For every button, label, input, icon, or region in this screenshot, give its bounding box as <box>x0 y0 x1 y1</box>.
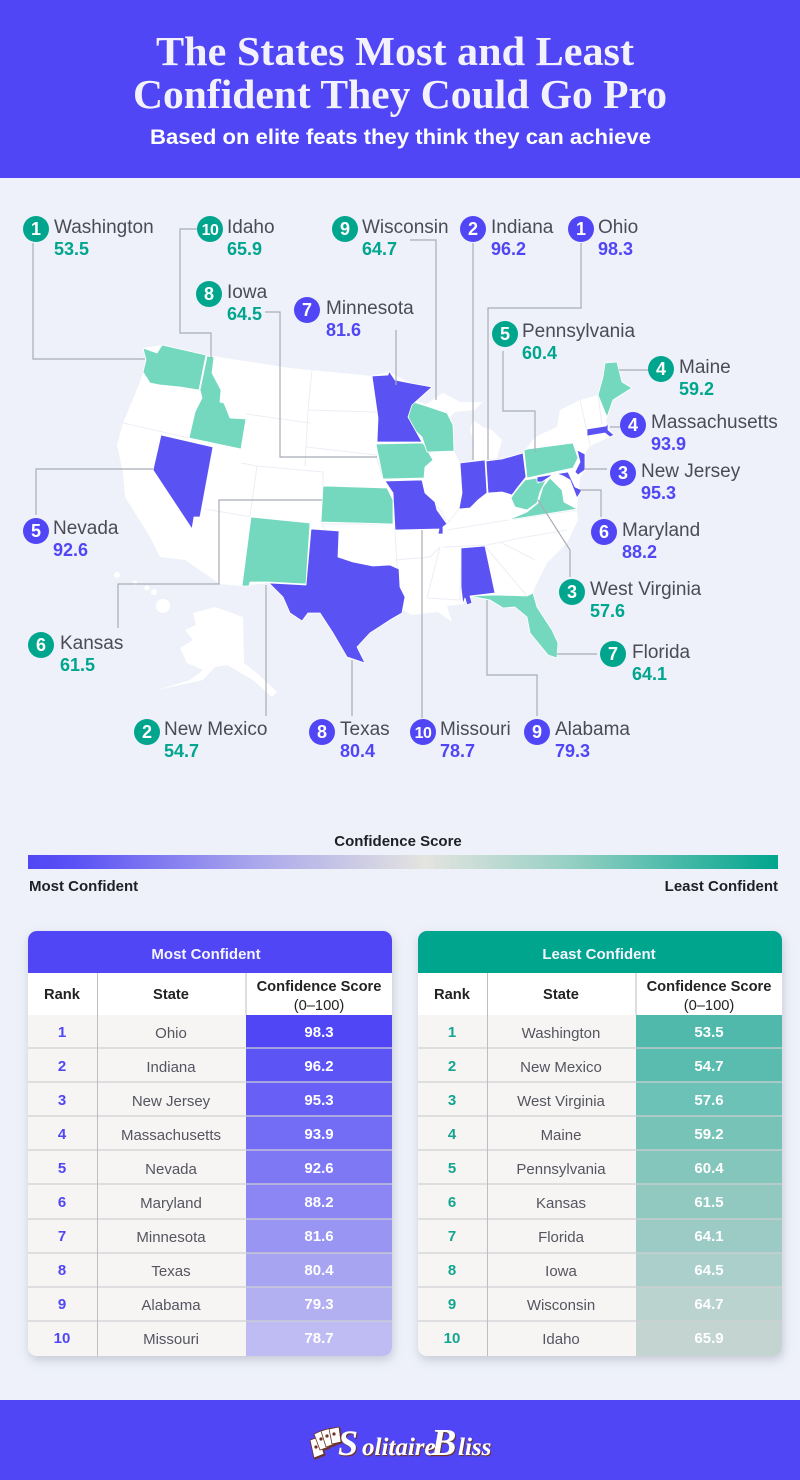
label: Ohio: 98.3 <box>598 239 633 259</box>
label: Missouri <box>410 719 511 761</box>
rows: Iowa <box>545 1263 577 1280</box>
label: Massachusetts: 4 <box>628 415 638 435</box>
leader lines <box>33 229 648 718</box>
base map: non-ranked states <box>117 345 614 622</box>
label: West Virginia <box>559 579 702 621</box>
label: Indiana: Indiana <box>491 217 554 238</box>
rows: 65.9 <box>694 1330 724 1347</box>
rows: 88.2 <box>304 1194 334 1211</box>
rows: 10 <box>54 1330 70 1347</box>
rows: 93.9 <box>304 1126 334 1143</box>
rows: 4 <box>448 1126 457 1143</box>
label: Maine: Maine <box>679 357 731 378</box>
label: New Jersey: 3 <box>618 463 628 483</box>
rows: 4 <box>58 1126 67 1143</box>
label: Massachusetts: 93.9 <box>651 434 686 454</box>
column headers <box>434 979 771 1014</box>
rows: Wisconsin <box>527 1297 595 1314</box>
rows: Kansas <box>536 1195 586 1212</box>
rows: 59.2 <box>694 1126 724 1143</box>
label: Washington: 53.5 <box>54 239 89 259</box>
label: Maryland <box>591 519 700 562</box>
column headers: Confidence Score <box>647 979 771 995</box>
label: Florida: 64.1 <box>632 664 667 684</box>
label: Maine <box>648 356 731 399</box>
label: Iowa: 64.5 <box>227 304 262 324</box>
rows: 64.1 <box>694 1228 724 1245</box>
rows: 6 <box>58 1194 66 1211</box>
label: Idaho: 10 <box>202 222 219 239</box>
label: Kansas: Kansas <box>60 633 123 654</box>
label: Minnesota: 81.6 <box>326 320 361 340</box>
label: Florida <box>600 641 691 684</box>
label: Nevada <box>23 518 119 560</box>
label: West Virginia: 57.6 <box>590 601 625 621</box>
rows: Indiana <box>146 1059 196 1076</box>
rows <box>444 1024 724 1348</box>
rows: 3 <box>58 1092 66 1109</box>
header banner <box>0 0 800 178</box>
label: New Mexico: 2 <box>142 722 152 742</box>
title: Confident They Could Go Pro <box>133 71 667 117</box>
label: Alabama: 9 <box>532 722 542 742</box>
label: New Jersey: 95.3 <box>641 483 676 503</box>
rows: 57.6 <box>694 1092 724 1109</box>
label: West Virginia: 3 <box>567 582 577 602</box>
rows: 60.4 <box>694 1160 724 1177</box>
column headers: (0–100) <box>294 998 344 1014</box>
rows: 95.3 <box>304 1092 334 1109</box>
label: Nevada: Nevada <box>53 518 119 539</box>
wordmark: liss <box>458 1434 491 1461</box>
rows: 8 <box>58 1262 66 1279</box>
label: New Jersey: New Jersey <box>641 461 741 482</box>
label: Missouri: Missouri <box>440 719 511 740</box>
title: The States Most and Least <box>156 28 634 74</box>
label: Alabama: Alabama <box>555 719 630 740</box>
wordmark: S <box>338 1423 358 1463</box>
label: New Mexico <box>134 719 267 761</box>
map of the United States <box>114 345 632 697</box>
label: Indiana: 2 <box>468 219 478 239</box>
label: Texas: Texas <box>340 719 390 740</box>
table title: Most Confident <box>151 946 261 963</box>
rows: Alabama <box>141 1297 201 1314</box>
subtitle: Based on elite feats they think they can achieve <box>150 126 651 149</box>
label: Washington <box>23 216 154 259</box>
rows: 8 <box>448 1262 456 1279</box>
label: Texas <box>309 719 390 761</box>
label: New Mexico: 54.7 <box>164 741 199 761</box>
rows: 9 <box>58 1296 66 1313</box>
rows: 78.7 <box>304 1330 334 1347</box>
rows: 80.4 <box>304 1262 334 1279</box>
label: Texas: 8 <box>317 722 327 742</box>
label: Maryland: 6 <box>599 522 609 542</box>
label: Indiana <box>460 216 554 259</box>
label: Idaho: Idaho <box>227 217 275 238</box>
column headers: Rank <box>44 987 81 1003</box>
rows: 79.3 <box>304 1296 334 1313</box>
rows <box>54 1024 334 1348</box>
Hawaii <box>114 572 170 613</box>
legend: confidence score gradient <box>28 833 778 895</box>
Least confident states <box>143 345 632 658</box>
label: Ohio: 1 <box>576 219 586 239</box>
rows: 7 <box>58 1228 66 1245</box>
rows: 5 <box>58 1160 66 1177</box>
rows: 10 <box>444 1330 460 1347</box>
rows: 7 <box>448 1228 456 1245</box>
rows: 6 <box>448 1194 456 1211</box>
rows: New Jersey <box>132 1093 211 1110</box>
footer banner <box>0 1400 800 1480</box>
label: Wisconsin: Wisconsin <box>362 217 449 238</box>
label: Maine: 4 <box>656 359 666 379</box>
label: Iowa: Iowa <box>227 282 268 303</box>
icon: card pips <box>314 1432 336 1449</box>
label: Maine: 59.2 <box>679 379 714 399</box>
table title: Least Confident <box>542 946 656 963</box>
label: Idaho <box>197 216 275 259</box>
column headers: Confidence Score <box>257 979 381 995</box>
rows: Minnesota <box>136 1229 206 1246</box>
rows: 64.5 <box>694 1262 724 1279</box>
label: New Mexico: New Mexico <box>164 719 267 740</box>
label: Missouri: 10 <box>415 725 432 742</box>
label: Idaho: 65.9 <box>227 239 262 259</box>
column headers <box>44 979 381 1014</box>
rows: 96.2 <box>304 1058 334 1075</box>
column headers: Rank <box>434 987 471 1003</box>
rows: Florida <box>538 1229 585 1246</box>
logo: Solitaire Bliss <box>310 1422 491 1464</box>
rows: 1 <box>58 1024 66 1041</box>
Alaska <box>157 607 277 697</box>
label: Iowa: 8 <box>204 284 214 304</box>
column headers: (0–100) <box>684 998 734 1014</box>
label: Ohio: Ohio <box>598 217 638 238</box>
rows: Maine <box>541 1127 581 1144</box>
label: Kansas: 61.5 <box>60 655 95 675</box>
legend: confidence score gradient: Least Confident <box>665 878 778 895</box>
label: Minnesota <box>294 297 414 340</box>
label: Indiana: 96.2 <box>491 239 526 259</box>
rows: Maryland <box>140 1195 202 1212</box>
rows: Washington <box>522 1025 600 1042</box>
label: Pennsylvania: 60.4 <box>522 343 557 363</box>
rows: 3 <box>448 1092 456 1109</box>
label: Pennsylvania: 5 <box>500 324 510 344</box>
label: Missouri: 78.7 <box>440 741 475 761</box>
label: Pennsylvania: Pennsylvania <box>522 321 635 342</box>
rows: 1 <box>448 1024 456 1041</box>
rows: Ohio <box>155 1025 187 1042</box>
label: Alabama <box>524 719 630 761</box>
rows: 9 <box>448 1296 456 1313</box>
wordmark: B <box>430 1422 456 1464</box>
icon: fanned playing cards <box>310 1427 341 1458</box>
label: Kansas: 6 <box>36 635 46 655</box>
rows: 53.5 <box>694 1024 724 1041</box>
label: Nevada: 5 <box>31 521 41 541</box>
rows: New Mexico <box>520 1059 602 1076</box>
rows: 98.3 <box>304 1024 334 1041</box>
label: Florida: 7 <box>608 644 618 664</box>
label: Florida: Florida <box>632 642 691 663</box>
column headers: State <box>543 987 579 1003</box>
rows: 64.7 <box>694 1296 724 1313</box>
label: Massachusetts: Massachusetts <box>651 412 778 433</box>
title <box>133 28 667 117</box>
panel: least confident table <box>418 931 782 1356</box>
panel: most confident table <box>28 931 392 1356</box>
rows: 2 <box>58 1058 66 1075</box>
rows: 2 <box>448 1058 456 1075</box>
column headers: State <box>153 987 189 1003</box>
label: Kansas <box>28 632 123 675</box>
wordmark: olitaire <box>362 1434 436 1461</box>
label: Texas: 80.4 <box>340 741 375 761</box>
label: Pennsylvania <box>492 321 635 363</box>
rows: Pennsylvania <box>516 1161 606 1178</box>
label: Maryland: 88.2 <box>622 542 657 562</box>
label: Wisconsin: 64.7 <box>362 239 397 259</box>
label: Minnesota: 7 <box>302 300 312 320</box>
legend: confidence score gradient: Confidence Score <box>334 833 462 850</box>
label: Massachusetts <box>620 412 778 454</box>
Most confident states <box>153 371 614 663</box>
rows: Texas <box>151 1263 191 1280</box>
rows: 92.6 <box>304 1160 334 1177</box>
rows: 5 <box>448 1160 456 1177</box>
label: Washington: 1 <box>31 219 41 239</box>
rows: 54.7 <box>694 1058 724 1075</box>
rows: Missouri <box>143 1331 199 1348</box>
label: Washington: Washington <box>54 217 154 238</box>
label: Wisconsin <box>332 216 449 259</box>
label: Maryland: Maryland <box>622 520 700 541</box>
label: Ohio <box>568 216 638 259</box>
rows: 61.5 <box>694 1194 724 1211</box>
label: Iowa <box>196 281 268 324</box>
label: West Virginia: West Virginia <box>590 579 702 600</box>
rows: 81.6 <box>304 1228 334 1245</box>
rows: Massachusetts <box>121 1127 221 1144</box>
label: New Jersey <box>610 460 741 503</box>
label: Nevada: 92.6 <box>53 540 88 560</box>
label: Minnesota: Minnesota <box>326 298 414 319</box>
label: Alabama: 79.3 <box>555 741 590 761</box>
label: Wisconsin: 9 <box>340 219 350 239</box>
legend: confidence score gradient: Most Confident <box>29 878 138 895</box>
rows: Idaho <box>542 1331 580 1348</box>
rows: West Virginia <box>517 1093 606 1110</box>
rows: Nevada <box>145 1161 198 1178</box>
